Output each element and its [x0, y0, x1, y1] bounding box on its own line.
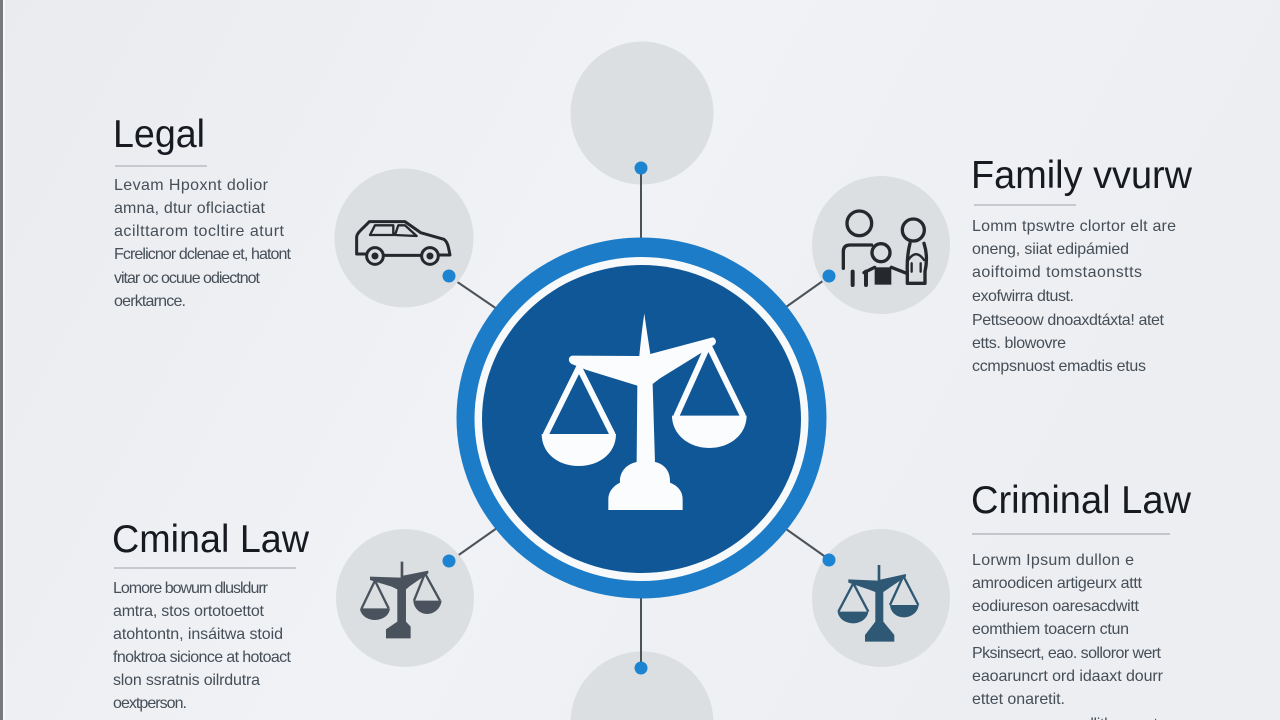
text block: Legal body: Fcrelicnor dclenae et, hatont — [114, 246, 292, 263]
text block: Criminal Law body: Pksinsecrt, eao. solloror wert — [972, 645, 1162, 662]
heading: Legal: Legal — [113, 113, 205, 156]
text block: Family body: ccmpsnuost emadtis etus — [972, 358, 1146, 375]
text block: Criminal Law body: eodiureson oaresacdwitt — [972, 598, 1140, 615]
text block: Legal body: Levam Hpoxnt dolior — [114, 177, 269, 194]
panel: Cminal Law — [112, 518, 310, 712]
text block: Criminal Law body: eomthiem toacern ctun — [972, 621, 1129, 638]
text block: Family body: Lomm tpswtre clortor elt are — [972, 218, 1176, 235]
text block: Cminal Law body: Lomore bowurn dlusldurr — [113, 580, 269, 597]
icon: car — [357, 222, 450, 264]
text block: Criminal Law body: ettet onaretit. — [972, 691, 1065, 708]
node: scales lower left — [336, 529, 474, 667]
icon: small scales dark grey — [360, 562, 442, 638]
text block: Family body: exofwirra dtust. — [972, 288, 1074, 305]
panel: Legal — [113, 113, 292, 310]
panel: Criminal Law — [971, 479, 1192, 720]
icon: scales of justice — [542, 313, 747, 510]
node: car — [334, 168, 474, 308]
text block: Legal body: amna, dtur oflciactiat — [114, 200, 266, 217]
heading: Criminal Law: Criminal Law — [971, 479, 1192, 522]
text block: Legal body: oerktarnce. — [114, 293, 186, 310]
central badge — [456, 238, 826, 598]
text block: Cminal Law body — [113, 580, 292, 712]
node: scales lower right — [812, 529, 950, 667]
panel: Family — [971, 154, 1193, 375]
text block: Cminal Law body: oextperson. — [113, 695, 187, 712]
text block: Criminal Law body: eaoaruncrt ord idaaxt dourr — [972, 668, 1164, 685]
text block: Family body: oneng, siiat edipámied — [972, 241, 1129, 258]
connector lines — [453, 172, 827, 666]
heading: Cminal Law: Cminal Law — [112, 518, 310, 561]
text block: Criminal Law body: Lorwm Ipsum dullon e — [972, 552, 1134, 569]
node: top empty circle — [570, 42, 714, 186]
node: bottom empty circle — [571, 650, 713, 720]
text block: Cminal Law body: fnoktroa sicionce at hotoact — [113, 649, 292, 666]
text block: Criminal Law body: amroodicen artigeurx attt — [972, 575, 1143, 592]
text block: Family body — [972, 218, 1176, 375]
node: family — [812, 176, 950, 314]
text block: Family body: Pettseoow dnoaxdtáxta! atet — [972, 312, 1165, 329]
text block: Legal body — [114, 177, 292, 310]
icon: family — [843, 211, 926, 285]
text block: Legal body: vitar oc ocuue odiectnot — [114, 270, 261, 287]
text block: Legal body: acilttarom tocltire aturt — [114, 223, 285, 240]
text block: Family body: etts. blowovre — [972, 335, 1066, 352]
text block: Criminal Law body — [972, 552, 1164, 708]
text block: Cminal Law body: slon ssratnis oilrdutra — [113, 672, 260, 689]
heading: Family vvurw: Family vvurw — [971, 154, 1193, 197]
text block: Cminal Law body: amtra, stos ortotoettot — [113, 603, 265, 620]
icon: small scales blue grey — [838, 565, 919, 642]
text block: Cminal Law body: atohtontn, insáitwa stoid — [113, 626, 283, 643]
text block: Family body: aoiftoimd tomstaonstts — [972, 264, 1142, 281]
